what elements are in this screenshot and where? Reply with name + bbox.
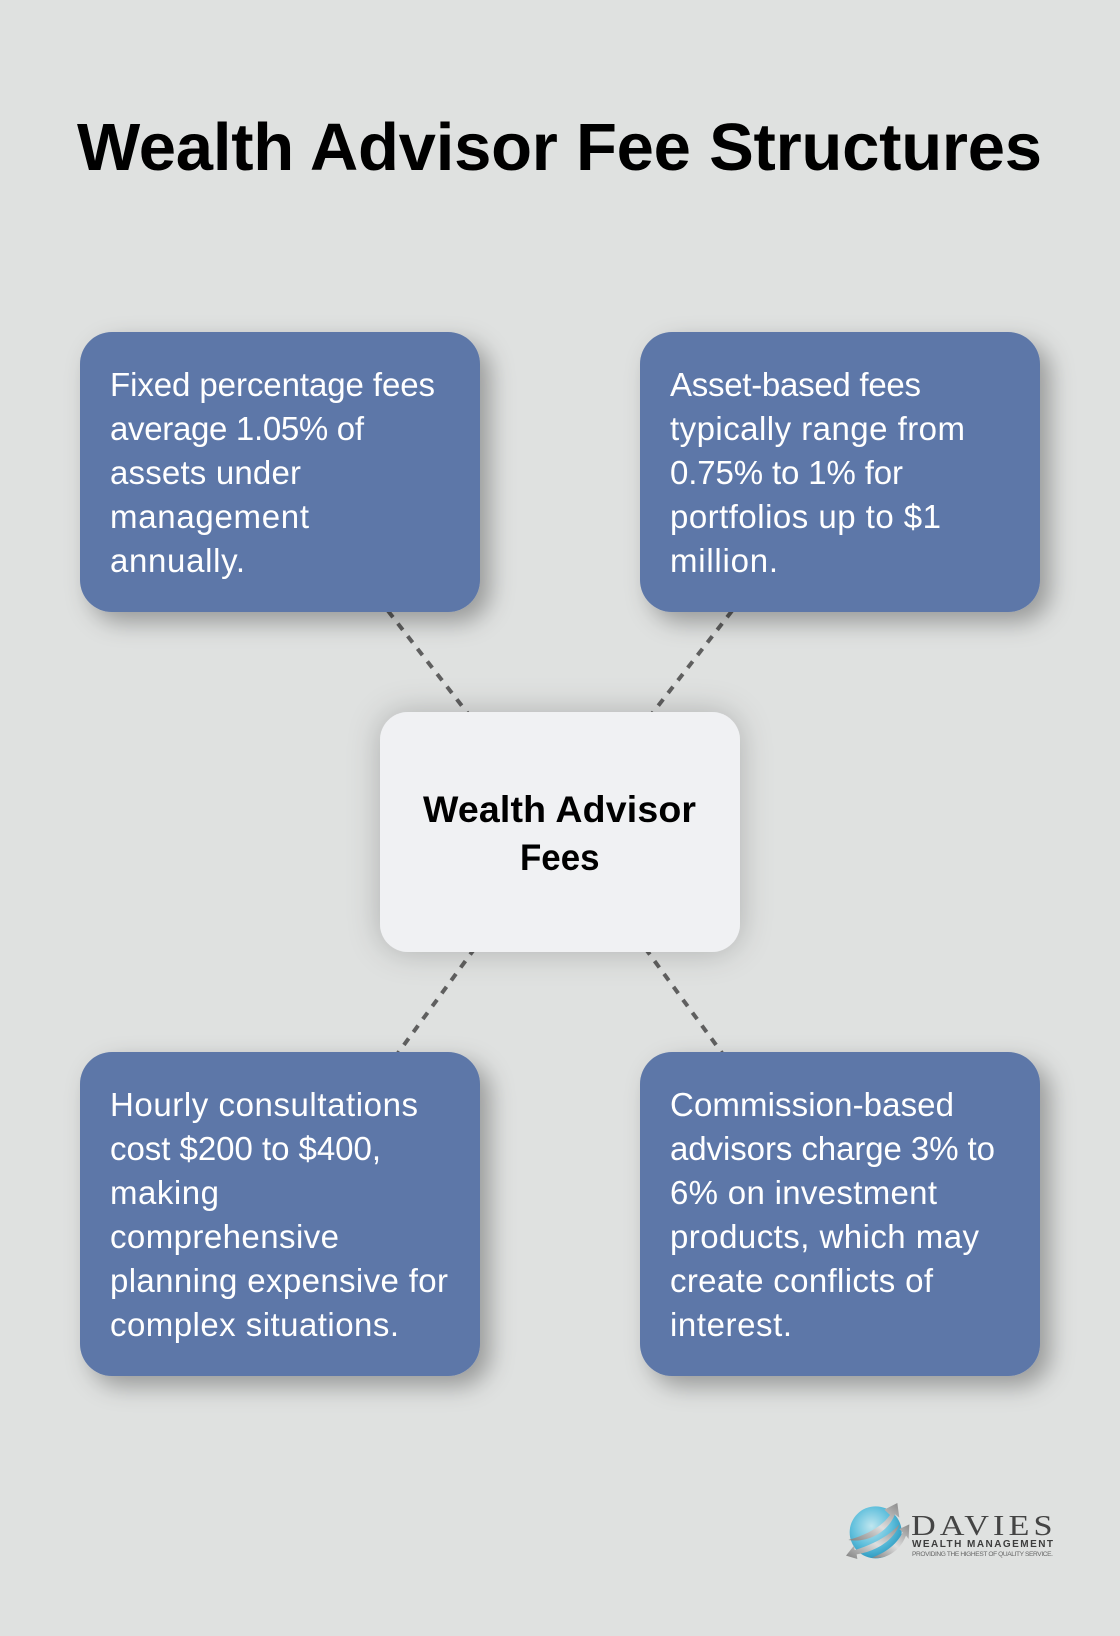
text: commission-based advisors: products, which may [670,1218,980,1255]
panel: commission-based advisors [640,1052,1040,1376]
text: hourly consultations: comprehensive [110,1218,339,1255]
text: asset-based fees: portfolios up to $1 [670,498,941,535]
text: asset-based fees: million. [670,542,778,579]
text: commission-based advisors: advisors charge 3% to [670,1130,995,1167]
text: fixed percentage fees [110,366,435,579]
text: center node heading: Fees [520,836,599,878]
text: commission-based advisors [670,1086,995,1343]
logo wordmark: DAVIES [911,1509,1053,1541]
title: Wealth Advisor Fee Structures [77,110,1042,185]
text: asset-based fees: Asset-based fees [670,366,921,403]
text: commission-based advisors: Commission-based [670,1086,954,1123]
text: asset-based fees: 0.75% to 1% for [670,454,903,491]
logo: Davies Wealth Management [846,1503,1053,1559]
panel: asset-based fees [640,332,1040,612]
text: fixed percentage fees: annually. [110,542,245,579]
text: hourly consultations: complex situations. [110,1306,399,1343]
panel: center node [380,712,740,952]
connector: top left card to center [280,472,560,832]
text: fixed percentage fees: average 1.05% of [110,410,365,447]
text: commission-based advisors: interest. [670,1306,792,1343]
text: fixed percentage fees: assets under [110,454,301,491]
text: center node heading [423,788,696,878]
panel: fixed percentage fees [80,332,480,612]
text: fixed percentage fees: management [110,498,309,535]
connector: center to bottom left card [280,832,560,1214]
text: hourly consultations [110,1086,448,1343]
text: asset-based fees: typically range from [670,410,965,447]
icon: globe with arrows [846,1503,909,1559]
logo subtitle: WEALTH MANAGEMENT [912,1539,1053,1550]
text: center node heading: Wealth Advisor [423,788,696,830]
text: commission-based advisors: create conflicts of [670,1262,934,1299]
connector: center to bottom right card [560,832,840,1214]
text: hourly consultations: making [110,1174,219,1211]
text: hourly consultations: Hourly consultations [110,1086,418,1123]
text: asset-based fees [670,366,965,579]
text: fixed percentage fees: Fixed percentage fees [110,366,435,403]
text: hourly consultations: planning expensive for [110,1262,448,1299]
connector: top right card to center [560,472,840,832]
text: commission-based advisors: 6% on investment [670,1174,937,1211]
text: hourly consultations: cost $200 to $400, [110,1130,381,1167]
panel: hourly consultations [80,1052,480,1376]
logo tagline: PROVIDING THE HIGHEST OF QUALITY SERVICE. [912,1551,1053,1558]
